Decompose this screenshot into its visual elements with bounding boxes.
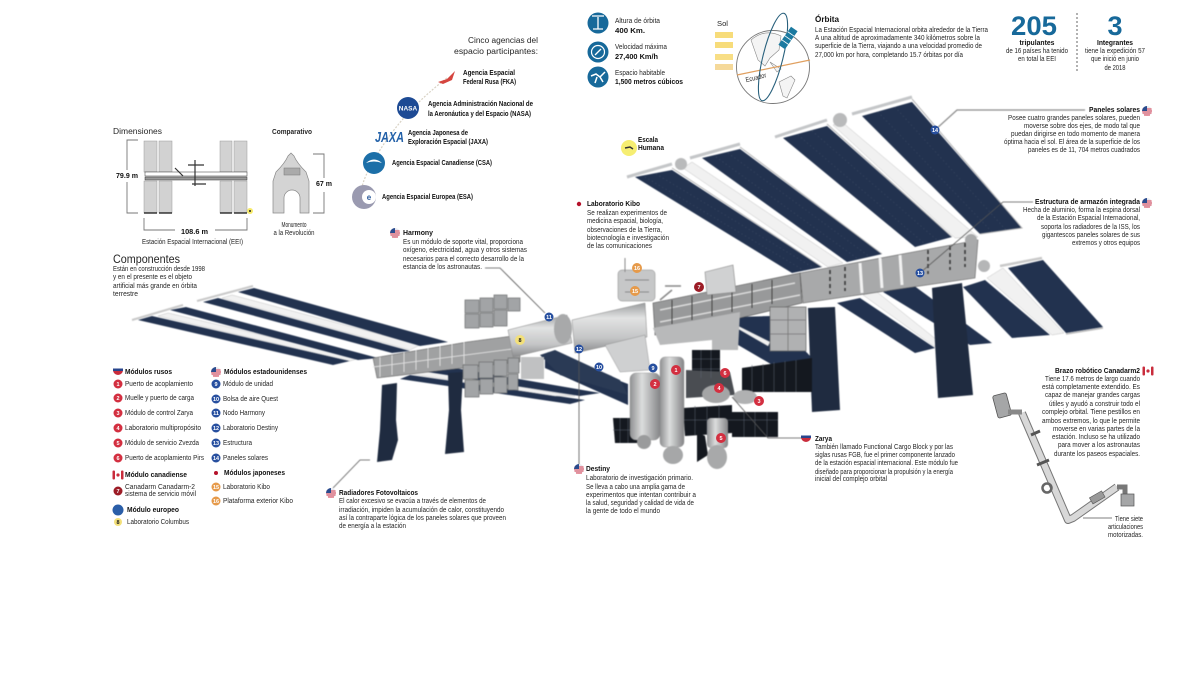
sun rays xyxy=(715,21,733,70)
stat: crew 205: en total la EEI xyxy=(1018,56,1056,63)
arm note xyxy=(1108,516,1143,539)
callout: truss: soporta los radiadores de la ISS, los xyxy=(1041,224,1140,231)
legend: US modules: 11 xyxy=(213,411,219,417)
orbit text: Órbita xyxy=(815,15,840,24)
legend: Canadian module: 7 xyxy=(116,489,120,495)
JAXA text xyxy=(408,130,488,146)
speed text: Velocidad máxima xyxy=(615,44,667,51)
numbered markers: 15 xyxy=(632,289,638,295)
ISS illustration xyxy=(132,97,1103,488)
legend: US modules: Paneles solares xyxy=(223,455,268,462)
callout: radiators: de energía a la estación xyxy=(339,523,406,530)
callout: Destiny: la salud, seguridad y calidad de vida de xyxy=(586,500,694,507)
radiator clusters xyxy=(463,295,520,397)
orbit diagram xyxy=(715,11,988,104)
legend: Japanese modules xyxy=(212,470,293,506)
legend: Canadian module: Módulo canadiense xyxy=(125,472,187,479)
callout: Kibo: medicina espacial, biología, xyxy=(587,218,663,225)
stat: 3 members: Integrantes xyxy=(1097,40,1133,47)
panel: comparison monument: 67 m xyxy=(316,181,332,188)
top stats: orbit figures xyxy=(588,12,683,88)
numbered markers: 8 xyxy=(518,338,522,344)
legend: US modules: Estructura xyxy=(223,440,252,447)
numbered markers: 11 xyxy=(546,315,552,321)
agencies heading: Cinco agencias del xyxy=(468,36,538,45)
legend: US modules: 10 xyxy=(213,397,219,403)
speed text xyxy=(615,44,667,61)
legend: US modules: Bolsa de aire Quest xyxy=(223,396,278,403)
right solar arrays upper xyxy=(627,97,1022,273)
stat: 3 members xyxy=(1085,11,1145,72)
components heading: Están en construcción desde 1998 xyxy=(113,266,205,273)
agencies heading: espacio participantes: xyxy=(454,47,538,56)
sun rays: Sol xyxy=(717,21,728,28)
callout: Destiny: Destiny xyxy=(586,466,610,473)
JAXA text: Agencia Japonesa de xyxy=(408,130,468,137)
legend: Japanese modules: 15 xyxy=(213,485,219,491)
numbered markers: 14 xyxy=(932,128,939,134)
callout: Canadarm2: complejo orbital. Tiene pestillos en xyxy=(1042,409,1140,416)
FKA text: Federal Rusa (FKA) xyxy=(463,79,516,86)
legend: US modules: 9 xyxy=(214,382,218,388)
icon: ESA: e xyxy=(367,193,372,202)
stat: crew 205: tripulantes xyxy=(1020,40,1055,47)
panel: comparison monument: Comparativo xyxy=(272,129,312,136)
arm note: motorizadas. xyxy=(1108,532,1143,539)
numbered markers: 5 xyxy=(719,436,723,442)
callout: truss: extremos y otros equipos xyxy=(1072,240,1140,247)
stat: crew 205 xyxy=(1006,11,1068,63)
numbered markers: 4 xyxy=(717,386,721,392)
left truss xyxy=(373,335,520,378)
components heading: terrestre xyxy=(113,291,138,298)
callout: truss: gigantescos paneles solares de sus xyxy=(1042,232,1140,239)
stat: 3 members: de 2018 xyxy=(1104,65,1126,72)
panel: dimensions xyxy=(113,126,253,246)
callout: solar panels: moverse sobre dos ejes, de modo tal que xyxy=(1024,123,1140,130)
Zarya and Russian panels xyxy=(613,350,812,462)
legend: Russian modules: 1 xyxy=(116,382,120,388)
legend: Russian modules: Puerto de acoplamiento Pirs xyxy=(125,455,204,462)
legend: Russian modules: Módulos rusos xyxy=(125,369,172,376)
callout: Canadarm2: para mover a los astronautas xyxy=(1058,442,1140,449)
legend: US modules: Módulo de unidad xyxy=(223,381,273,388)
callout: Canadarm2: Tiene 17.6 metros de largo cuando xyxy=(1045,376,1140,383)
numbered markers: 6 xyxy=(723,371,727,377)
components heading: Componentes xyxy=(113,254,180,266)
monument caption: a la Revolución xyxy=(274,230,315,237)
callout: Harmony: oxígeno, electricidad, agua y otros sistemas xyxy=(403,247,527,254)
legend: US modules: 12 xyxy=(213,426,219,432)
callout: Zarya: inicial del complejo orbital xyxy=(815,476,887,483)
numbered markers: 3 xyxy=(757,399,761,405)
human scale xyxy=(621,137,664,156)
Russian segment xyxy=(630,357,757,469)
components heading: y en el presente es el objeto xyxy=(113,274,192,281)
FKA text: Agencia Espacial xyxy=(463,70,515,77)
icon: speed xyxy=(588,42,608,62)
arm note: Tiene siete xyxy=(1115,516,1143,523)
ISS top-view silhouette xyxy=(144,141,247,213)
callout: Zarya: También llamado Functional Cargo Block y por las xyxy=(815,444,953,451)
stat: 3 members: 3 xyxy=(1107,11,1123,41)
callout: Harmony: Harmony xyxy=(403,230,433,237)
numbered markers: 10 xyxy=(596,365,602,371)
legend: Russian modules: Módulo de control Zarya xyxy=(125,410,193,417)
legend: Russian modules: 3 xyxy=(116,411,120,417)
callout: truss: Hecha de aluminio, forma la espina dorsal xyxy=(1023,207,1140,214)
components heading xyxy=(113,254,205,298)
panel: comparison monument xyxy=(272,129,332,237)
Kibo modules xyxy=(618,258,655,301)
orbit text: 27,000 km por hora, completando 15.7 órbitas por día xyxy=(815,52,963,59)
right radiators xyxy=(808,283,973,412)
width label: 108.6 m xyxy=(181,229,208,236)
human scale: Escala xyxy=(638,137,658,144)
callout: Destiny xyxy=(574,464,696,515)
main truss xyxy=(653,234,978,351)
legend: Canadian module: Canadarm Canadarm-2 xyxy=(125,484,195,491)
NASA text xyxy=(428,101,533,118)
legend: US modules: Laboratorio Destiny xyxy=(223,425,278,432)
orbit text: La Estación Espacial Internacional orbita alrededor de la Tierra xyxy=(815,27,988,34)
FKA text xyxy=(463,70,516,86)
stat: crew 205: 205 xyxy=(1011,11,1057,41)
globe xyxy=(736,11,810,104)
caption: Estación Espacial Internacional (EEI) xyxy=(142,239,243,246)
components heading: artificial más grande en órbita xyxy=(113,283,197,290)
legend: Russian modules: 5 xyxy=(116,441,120,447)
icon: altitude xyxy=(588,12,608,34)
callout: truss: Estructura de armazón integrada xyxy=(1035,199,1140,206)
callout: Kibo xyxy=(577,201,669,250)
numbered markers: 1 xyxy=(674,368,678,374)
legend: Japanese modules: Plataforma exterior Kibo xyxy=(223,498,293,505)
dimensions heading: Dimensiones xyxy=(113,126,162,136)
callout: solar panels: Posee cuatro grandes paneles solares, pueden xyxy=(1008,115,1140,122)
callout: radiators: El calor excesivo se evacúa a través de elementos de xyxy=(339,498,486,505)
callout: Canadarm2: durante los paseos espaciales. xyxy=(1054,451,1140,458)
legend: Canadian module xyxy=(112,470,196,498)
arm note: articulaciones xyxy=(1108,524,1143,531)
callout: radiators: Radiadores Fotovoltaicos xyxy=(339,490,418,497)
callout: Kibo: de las comunicaciones xyxy=(587,243,652,250)
ESA text: Agencia Espacial Europea (ESA) xyxy=(382,194,473,201)
legend: European module xyxy=(112,504,189,526)
legend: Japanese modules: 16 xyxy=(213,499,219,505)
legend: Russian modules: 4 xyxy=(116,426,120,432)
altitude text: 400 Km. xyxy=(615,28,645,35)
right solar arrays lower xyxy=(837,258,1103,353)
callout: Kibo: observaciones de la Tierra, xyxy=(587,227,662,234)
pressurised modules xyxy=(508,303,650,379)
orbit text: superficie de la Tierra, viajando a una velocidad promedio de xyxy=(815,43,982,50)
legend: European module: 8 xyxy=(116,520,120,526)
callout: Canadarm2: útiles y ayudó a construir todo el xyxy=(1049,401,1140,408)
callout: Zarya: Zarya xyxy=(815,436,832,443)
legend: European module: Módulo europeo xyxy=(127,507,179,514)
monument icon xyxy=(273,153,309,213)
callout: Kibo: Laboratorio Kibo xyxy=(587,201,640,208)
callout: Harmony: necesarios para el correcto desarrollo de la xyxy=(403,256,524,263)
callout: Canadarm2: ambos extremos, lo que le permite xyxy=(1042,418,1140,425)
legend: Japanese modules: Módulos japoneses xyxy=(224,470,285,477)
callout: Harmony: Es un módulo de soporte vital, proporciona xyxy=(403,239,523,246)
callout: solar panels xyxy=(1004,106,1152,154)
callout: Harmony xyxy=(390,228,527,271)
callout: Destiny: Laboratorio de investigación primario. xyxy=(586,475,693,482)
numbered markers xyxy=(515,126,940,443)
callout: Destiny: experimentos que intentan contribuir a xyxy=(586,492,696,499)
callout: Kibo: biotecnología e investigación xyxy=(587,235,669,242)
numbered markers: 13 xyxy=(917,271,923,277)
panel: agencies xyxy=(352,36,538,209)
agencies heading xyxy=(454,36,538,56)
callout: truss xyxy=(1023,198,1152,247)
icon: CSA xyxy=(363,152,385,174)
legend: US modules: Nodo Harmony xyxy=(223,410,265,417)
legend: US modules: Módulos estadounidenses xyxy=(224,369,307,376)
legend: US modules: 14 xyxy=(213,456,220,462)
callout: Destiny: la gente de todo el mundo xyxy=(586,508,660,515)
callout: radiators: así la contraparte lógica de los paneles solares que proveen xyxy=(339,515,506,522)
legend: Japanese modules: Laboratorio Kibo xyxy=(223,484,270,491)
orbit text: A una altitud de aproximadamente 340 kilómetros sobre la xyxy=(815,35,980,42)
callout: Harmony: estancia de los astronautas. xyxy=(403,264,482,271)
callout: solar panels: puedan dirigirse en todo momento de manera xyxy=(1011,131,1140,138)
legend: Russian modules: Puerto de acoplamiento xyxy=(125,381,193,388)
callout: solar panels: paneles es de 11, 704 metros cuadrados xyxy=(1028,147,1140,154)
callout: radiators xyxy=(326,488,506,530)
numbered markers: 16 xyxy=(634,266,640,272)
legend: Russian modules: Módulo de servicio Zvezda xyxy=(125,440,199,447)
legend: Canadian module: sistema de servicio móvil xyxy=(125,491,196,498)
habitable text: 1,500 metros cúbicos xyxy=(615,79,683,86)
icon: NASA: NASA xyxy=(399,106,418,112)
globe: Ecuador xyxy=(745,72,768,84)
icon: JAXA: JAXA xyxy=(375,129,404,146)
stat: 3 members: que inició en junio xyxy=(1091,56,1139,63)
callout: radiators: irradiación, impiden la acumulación de calor, constituyendo xyxy=(339,507,504,514)
stat: 3 members: tiene la expedición 57 xyxy=(1085,48,1145,55)
numbered markers: 7 xyxy=(697,285,701,291)
stat: crew 205: de 16 países ha tenido xyxy=(1006,48,1068,55)
CSA text: Agencia Espacial Canadiense (CSA) xyxy=(392,160,492,167)
callout: solar panels: Paneles solares xyxy=(1089,107,1140,114)
numbered markers: 9 xyxy=(651,366,655,372)
legend: US modules xyxy=(211,367,307,462)
callout: Zarya xyxy=(801,436,958,483)
height label: 79.9 m xyxy=(116,173,138,180)
callout: Zarya: diseñado para proporcionar la propulsión y la energía xyxy=(815,469,953,476)
altitude text: Altura de órbita xyxy=(615,18,660,25)
callout: Canadarm2: estación. Incluso se ha utilizado xyxy=(1052,434,1140,441)
legend: US modules: 13 xyxy=(213,441,219,447)
legend: modules xyxy=(112,367,307,526)
monument caption: Monumento xyxy=(282,222,307,229)
callout: Canadarm2 xyxy=(1042,366,1154,458)
monument caption xyxy=(274,222,315,237)
callout: Canadarm2: moverse en varias partes de la xyxy=(1053,426,1140,433)
callout: solar panels: óptima hacia el sol. El área de la superficie de los xyxy=(1004,139,1140,146)
legend: Russian modules: 6 xyxy=(116,456,120,462)
habitable text: Espacio habitable xyxy=(615,70,665,77)
numbered markers: 12 xyxy=(576,347,582,353)
callout: Canadarm2: capaz de manejar grandes cargas xyxy=(1045,392,1140,399)
legend: Russian modules: Muelle y puerto de carga xyxy=(125,395,194,402)
rear dark panels xyxy=(540,316,812,405)
altitude text xyxy=(615,18,660,35)
orbit text xyxy=(815,15,988,59)
callout: Destiny: Se lleva a cabo una amplia gama de xyxy=(586,484,685,491)
NASA text: Agencia Administración Nacional de xyxy=(428,101,533,108)
callout: truss: de la Estación Espacial Internacional, xyxy=(1037,215,1140,222)
legend: Russian modules xyxy=(113,368,204,462)
left solar arrays xyxy=(132,286,600,404)
legend: European module: Laboratorio Columbus xyxy=(127,519,189,526)
callout: Canadarm2: está completamente extendido. Es xyxy=(1042,384,1140,391)
callout: Zarya: siglas rusas FGB, fue el primer componente lanzado xyxy=(815,452,955,459)
habitable text xyxy=(615,70,683,86)
legend: Russian modules: Laboratorio multipropósito xyxy=(125,425,201,432)
speed text: 27,400 Km/h xyxy=(615,54,658,61)
NASA text: la Aeronáutica y del Espacio (NASA) xyxy=(428,111,531,118)
icon: FKA xyxy=(438,71,455,84)
human scale: Humana xyxy=(638,145,664,152)
icon: ESA xyxy=(352,185,376,209)
icon: habitable space xyxy=(588,66,608,88)
robotic arm illustration xyxy=(992,393,1134,520)
callout: Canadarm2: Brazo robótico Canadarm2 xyxy=(1055,368,1140,375)
legend: Russian modules: 2 xyxy=(116,396,120,402)
left radiators xyxy=(377,372,464,462)
numbered markers: 2 xyxy=(653,382,657,388)
callout: Kibo: Se realizan experimentos de xyxy=(587,210,667,217)
icon: NASA xyxy=(397,97,419,119)
leader lines xyxy=(333,110,1085,488)
JAXA text: Exploración Espacial (JAXA) xyxy=(408,139,488,146)
callout: Zarya: de la estación espacial internacional. Este módulo fue xyxy=(815,460,958,467)
